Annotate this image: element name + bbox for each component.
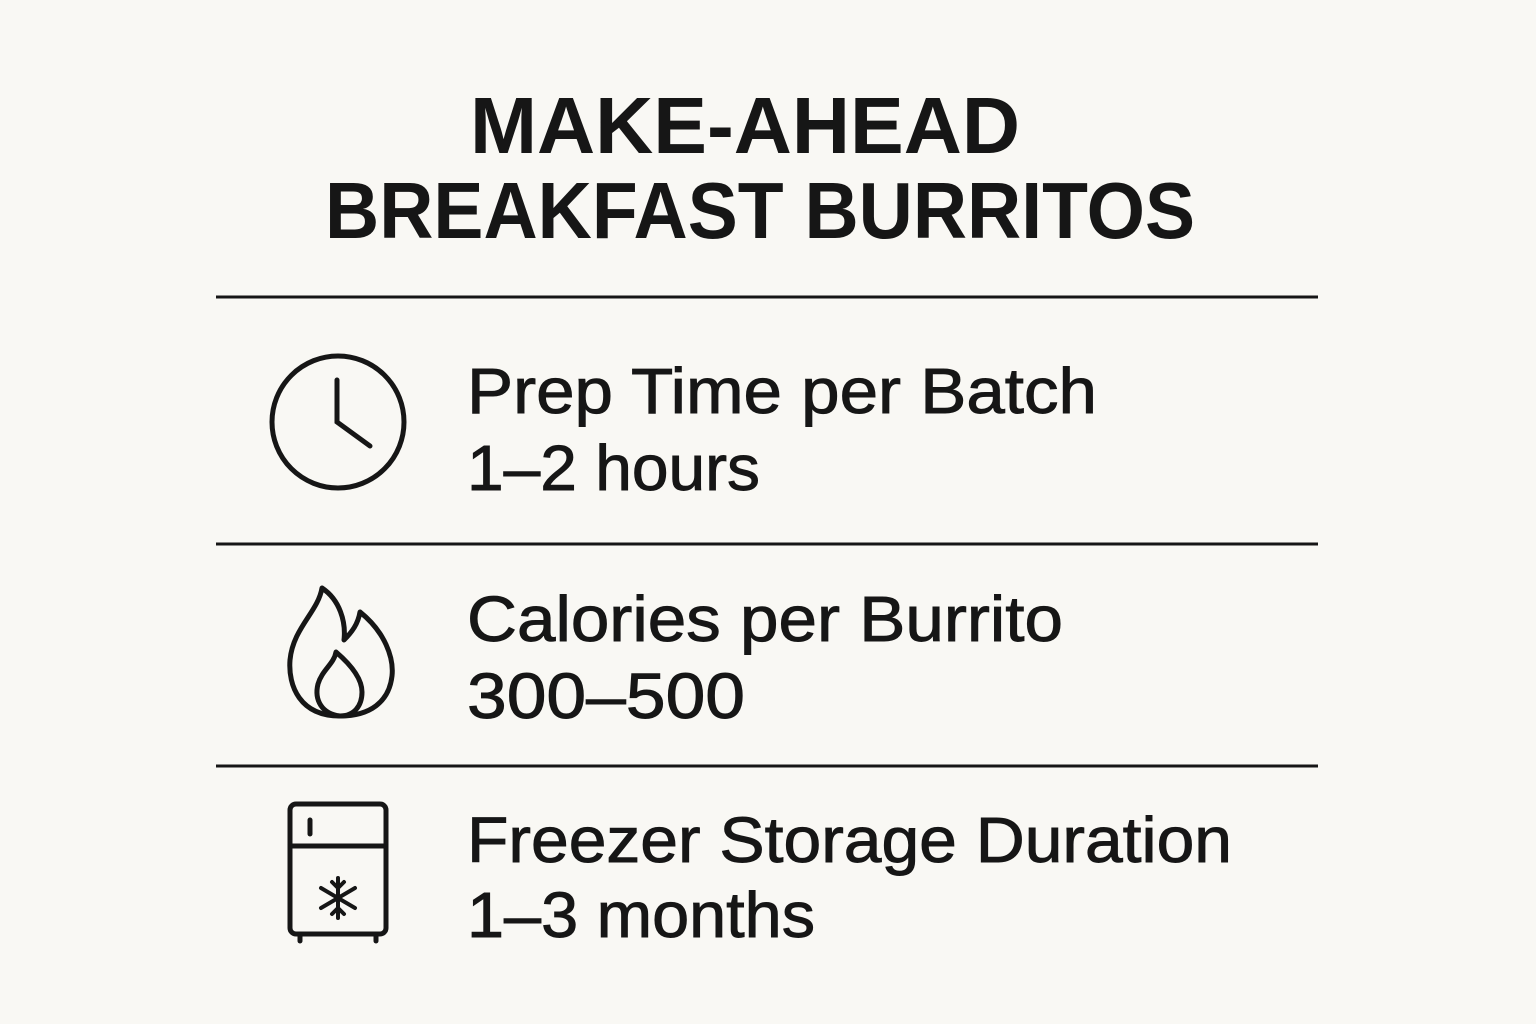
title: [325, 81, 1195, 255]
text: freezer: [467, 804, 1232, 951]
text: prep time: 1–2 hours: [467, 432, 760, 504]
icon: clock: [272, 356, 404, 488]
text: freezer: 1–3 months: [467, 879, 815, 951]
text: prep time: Prep Time per Batch: [467, 355, 1097, 427]
row: freezer: [290, 804, 1232, 951]
title: BREAKFAST BURRITOS: [325, 166, 1195, 255]
row: calories: [290, 583, 1063, 732]
text: calories: Calories per Burrito: [467, 583, 1063, 655]
text: calories: 300–500: [467, 660, 745, 732]
text: freezer: Freezer Storage Duration: [467, 804, 1232, 876]
row: prep time: [272, 355, 1097, 504]
text: calories: [467, 583, 1063, 732]
title: MAKE-AHEAD: [470, 81, 1020, 170]
icon: flame: [290, 588, 392, 716]
icon: freezer: [290, 804, 386, 941]
text: prep time: [467, 355, 1097, 504]
